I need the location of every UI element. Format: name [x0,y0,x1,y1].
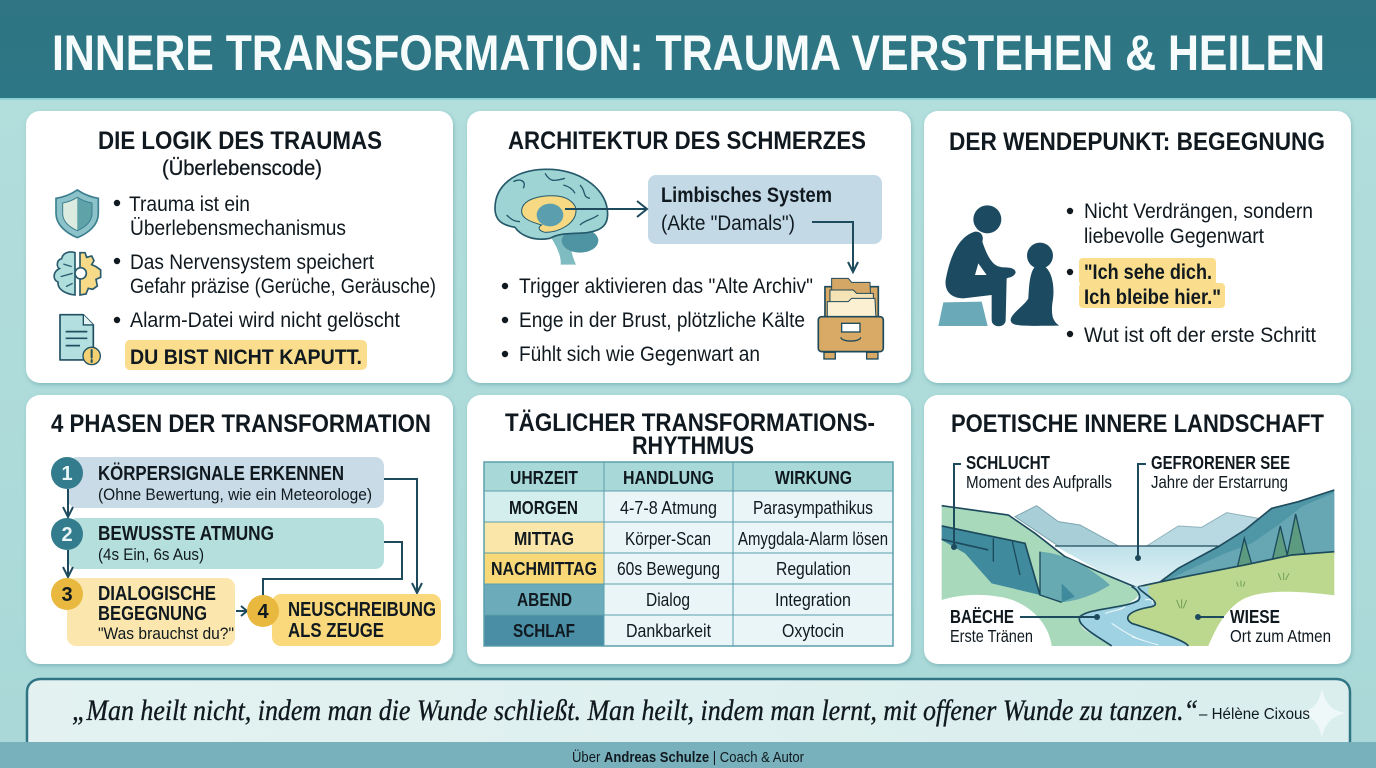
icon: sparkle [1300,688,1345,738]
table: Regulation [776,558,851,579]
bullet list: Fühlt sich wie Gegenwart an [519,342,760,366]
connector: 2 to 4 [263,542,402,596]
phase 4: 4 [257,601,269,623]
phase 2 [51,518,384,577]
phase 3: BEGEGNUNG [98,603,207,625]
arrow: 3 to 4 [236,606,247,616]
table: Integration [775,589,851,610]
bullet list: Gefahr präzise (Gerüche, Geräusche) [130,274,436,298]
heading: DIE LOGIK DES TRAUMAS [98,127,382,155]
table: Oxytocin [782,620,844,641]
table: WIRKUNG [775,467,852,488]
phase 4 [247,594,441,646]
table: NACHMITTAG [491,558,597,579]
panel: poetische Landschaft [924,395,1351,664]
bullet: presence: liebevolle Gegenwart [1084,224,1264,248]
phase 1: KÖRPERSIGNALE ERKENNEN [98,462,344,485]
bullet list: Alarm-Datei wird nicht gelöscht [130,308,400,332]
bullet: presence [1067,199,1313,248]
bullet: presence: Nicht Verdrängen, sondern [1084,199,1313,223]
table: UHRZEIT [510,467,579,488]
phase 2: (4s Ein, 6s Aus) [98,545,204,564]
label: gefrorener See [1135,452,1290,561]
bullet: anger: Wut ist oft der erste Schritt [1084,323,1316,347]
heading: POETISCHE INNERE LANDSCHAFT [951,410,1324,438]
table: 4-7-8 Atmung [620,497,717,518]
icon: brain [495,169,608,265]
table: MITTAG [514,528,574,549]
header band [0,0,1376,100]
table: 60s Bewegung [617,558,720,579]
phase 3: 3 [61,584,73,606]
callout: quote: "Ich sehe dich. [1084,260,1212,284]
panel: 4 Phasen [26,395,453,664]
table: MORGEN [509,497,578,518]
icon: adult and child [938,205,1059,326]
phase 1: 1 [61,463,73,485]
heading: RHYTHMUS [632,432,754,460]
table: HANDLUNG [623,467,714,488]
table: ABEND [517,589,572,610]
box: limbisches System [648,175,882,244]
arrow: box to archive [812,222,858,272]
phase 3 [51,578,235,646]
icon: brain and gear [54,252,101,295]
phase 1 [51,457,384,517]
callout: quote: Ich bleibe hier." [1084,285,1221,309]
label: Wiese: Ort zum Atmen [1230,626,1331,646]
callout: quote [1067,258,1225,309]
bullet list [502,274,813,366]
phase 1: (Ohne Bewertung, wie ein Meteorologe) [98,485,372,504]
table: Parasympathikus [753,497,873,518]
panel: Architektur des Schmerzes [467,111,911,383]
label: Bäche [950,606,1100,646]
phase 3: "Was brauchst du?" [98,624,234,643]
quote panel [27,679,1350,744]
label: Schlucht: Moment des Aufpralls [966,472,1112,492]
icon: shield [56,190,98,238]
bullet list: Enge in der Brust, plötzliche Kälte [519,308,805,332]
footer band: Über Andreas Schulze | Coach & Autor [572,748,804,766]
connector: 1 to 4 [384,479,422,593]
phase 4: ALS ZEUGE [288,620,384,642]
label: gefrorener See: Jahre der Erstarrung [1151,472,1288,492]
label: Schlucht [951,452,1112,550]
table: Amygdala-Alarm lösen [738,528,888,549]
label: Bäche: BAËCHE [950,606,1014,627]
heading: DER WENDEPUNKT: BEGEGNUNG [949,128,1325,156]
bullet list: Trigger aktivieren das "Alte Archiv" [519,274,813,298]
subheading: (Überlebenscode) [162,156,322,180]
label: Wiese: WIESE [1230,606,1280,627]
label: Wiese [1195,606,1331,646]
table [484,462,893,646]
table: Dialog [646,589,690,610]
phase 2: 2 [61,524,73,546]
footer band [0,742,1376,768]
label: Schlucht: SCHLUCHT [966,452,1051,473]
quote text: „Man heilt nicht, indem man die Wunde schließt. Man heilt, indem man lernt, mit offener Wunde zu tanzen.“ [72,694,1198,727]
table: Dankbarkeit [626,620,711,641]
phase 2: BEWUSSTE ATMUNG [98,523,274,545]
label: gefrorener See: GEFRORENER SEE [1151,452,1290,473]
table: Körper-Scan [625,528,711,549]
heading: 4 PHASEN DER TRANSFORMATION [51,410,431,438]
icon: alarm file [60,315,100,365]
label: Bäche: Erste Tränen [950,626,1033,646]
box: limbisches System: (Akte "Damals") [661,211,795,235]
heading [505,409,875,460]
panel: der Wendepunkt [924,111,1351,383]
landscape illustration [942,490,1334,646]
phase 3: DIALOGISCHE [98,583,216,605]
icon: file cabinet [818,278,883,359]
box: limbisches System: Limbisches System [661,183,832,207]
heading: TÄGLICHER TRANSFORMATIONS- [505,409,875,437]
bullet list [114,192,436,332]
panel: Tagesrhythmus [467,395,911,664]
arrow: brain to box [565,201,647,217]
bullet list: Das Nervensystem speichert [130,250,374,274]
quote attribution: – Hélène Cixous [1199,706,1310,723]
phase 4: NEUSCHREIBUNG [288,599,436,621]
bullet list: Überlebensmechanismus [130,216,346,240]
table: SCHLAF [513,620,575,641]
bullet list: Trauma ist ein [129,192,250,216]
callout: DU BIST NICHT KAPUTT. [130,345,362,369]
heading: ARCHITEKTUR DES SCHMERZES [508,127,866,155]
panel: die Logik des Traumas [26,111,453,383]
